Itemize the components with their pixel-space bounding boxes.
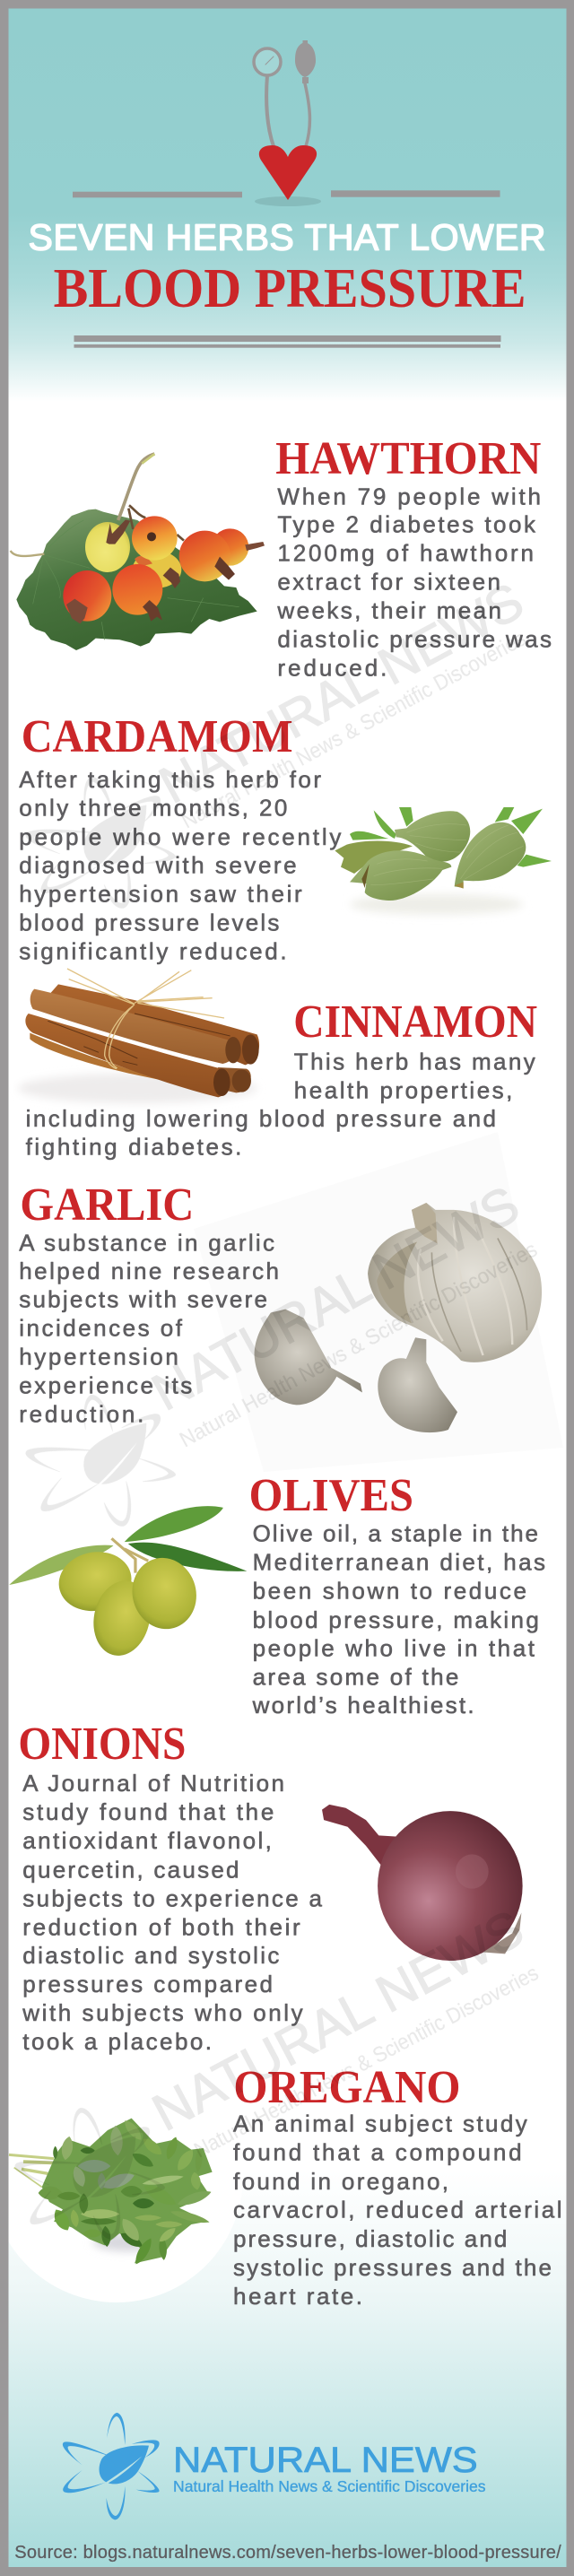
text: hawthorn: diastolic pressure was <box>277 626 552 653</box>
text: cinnamon: This herb has many <box>294 1049 535 1075</box>
watermark: middle <box>15 1175 542 1545</box>
text: olives <box>252 1519 545 1719</box>
source line: Source: blogs.naturalnews.com/seven-herbs-lower-blood-pressure/ <box>14 2543 561 2563</box>
header panel <box>9 9 567 402</box>
panel: cardamom <box>19 711 552 964</box>
illustration: olives with leaves <box>9 1506 247 1660</box>
text: onions: took a placebo. <box>22 2028 212 2055</box>
logo wordmark: NATURAL NEWS <box>173 2441 478 2480</box>
text: olives: been shown to reduce <box>253 1578 526 1605</box>
panel: onions <box>18 1719 523 2055</box>
garlic backdrop square <box>194 1132 563 1472</box>
footer gradient background <box>9 2171 567 2567</box>
text: cardamom: significantly reduced. <box>19 937 287 964</box>
icon: natural news atom leaf <box>63 2413 160 2519</box>
text: cardamom: hypertension saw their <box>19 880 302 907</box>
text: garlic: A substance in garlic <box>19 1229 274 1256</box>
watermark: middle: NATURAL NEWS <box>143 1175 528 1422</box>
heart shadow <box>255 196 321 206</box>
frame left edge fix <box>0 2063 9 2332</box>
text: onions: antioxidant flavonol, <box>22 1827 272 1854</box>
watermark: lower <box>4 1899 543 2258</box>
text: cardamom: After taking this herb for <box>19 766 321 793</box>
icon: blood pressure gauge and bulb <box>254 40 316 146</box>
text: hawthorn: reduced. <box>277 655 387 682</box>
text: onions: quercetin, caused <box>22 1856 239 1883</box>
header gradient background <box>9 9 567 402</box>
text: cardamom: blood pressure levels <box>19 909 279 936</box>
panel: cinnamon <box>18 969 537 1161</box>
illustration: cardamom pods <box>335 807 552 915</box>
text: cardamom: only three months, 20 <box>19 794 287 821</box>
text: onions: pressures compared <box>22 1971 273 1997</box>
panel: garlic <box>19 1179 542 1432</box>
white circle behind oregano <box>0 2049 243 2302</box>
text: olives: world’s healthiest. <box>252 1692 474 1719</box>
text: onions: diastolic and systolic <box>22 1942 279 1969</box>
text: cinnamon: including lowering blood pressure and <box>26 1105 496 1132</box>
text: onions <box>22 1770 323 2055</box>
illustration: cinnamon sticks <box>18 969 259 1103</box>
text: oregano: systolic pressures and the <box>233 2254 552 2281</box>
watermark: middle: Natural Health News & Scientific Discoveries <box>176 1237 542 1452</box>
footer logo <box>63 2413 486 2519</box>
text: olives: area some of the <box>253 1664 458 1691</box>
right top rule <box>331 190 500 197</box>
text: garlic: incidences of <box>19 1314 183 1341</box>
text: garlic: experience its <box>19 1371 192 1398</box>
heading: oregano: OREGANO <box>233 2062 461 2113</box>
text: oregano: found that a compound <box>233 2139 522 2166</box>
text: onions: A Journal of Nutrition <box>22 1770 284 1797</box>
text: onions: reduction of both their <box>22 1913 300 1940</box>
heading: cardamom: CARDAMOM <box>22 711 292 762</box>
watermark: upper: Natural Health News & Scientific Discoveries <box>178 626 530 833</box>
text: onions: study found that the <box>22 1798 274 1825</box>
watermark: upper <box>15 571 533 927</box>
watermark: upper: NATURAL NEWS <box>150 571 533 814</box>
text: oregano: found in oregano, <box>233 2168 448 2195</box>
text: hawthorn: When 79 people with <box>277 483 541 509</box>
title line 1: SEVEN HERBS THAT LOWER <box>29 217 545 258</box>
panel: oregano <box>9 2062 561 2310</box>
text: oregano: carvacrol, reduced arterial <box>233 2197 561 2224</box>
text: cardamom <box>19 766 341 964</box>
watermark: lower: Natural Health News & Scientific Discoveries <box>190 1961 543 2163</box>
text: oregano: pressure, diastolic and <box>233 2225 507 2252</box>
text: hawthorn: 1200mg of hawthorn <box>277 539 534 566</box>
title line 2: BLOOD PRESSURE <box>54 258 526 319</box>
text: cardamom: people who were recently <box>19 823 341 850</box>
lower rule thick <box>74 335 500 342</box>
heading: olives: OLIVES <box>249 1470 413 1521</box>
text: olives: Mediterranean diet, has <box>253 1548 545 1575</box>
text: cinnamon <box>26 1049 535 1161</box>
heading: onions: ONIONS <box>18 1719 186 1770</box>
text: cinnamon: fighting diabetes. <box>26 1134 241 1161</box>
text: cardamom: diagnosed with severe <box>19 852 297 879</box>
text: oregano <box>233 2110 561 2310</box>
text: hawthorn: weeks, their mean <box>276 596 501 623</box>
illustration: garlic bulb and cloves <box>255 1203 542 1432</box>
illustration: oregano sprig <box>9 2118 213 2267</box>
icon: red heart <box>259 145 317 200</box>
text: onions: subjects to experience a <box>22 1885 323 1912</box>
text: garlic: subjects with severe <box>19 1286 267 1313</box>
text: olives: people who live in that <box>253 1635 535 1662</box>
text: onions: with subjects who only <box>22 1999 303 2026</box>
text: cinnamon: health properties, <box>294 1076 512 1103</box>
illustration: red onion <box>322 1805 523 1961</box>
text: garlic <box>19 1229 279 1427</box>
text: garlic: helped nine research <box>19 1258 279 1284</box>
panel: hawthorn <box>11 433 552 682</box>
text: hawthorn: Type 2 diabetes took <box>277 511 536 538</box>
heading: cinnamon: CINNAMON <box>293 996 537 1048</box>
text: oregano: heart rate. <box>233 2283 362 2310</box>
lower rule thin <box>74 344 500 348</box>
text: hawthorn: extract for sixteen <box>277 569 500 596</box>
logo tagline: Natural Health News & Scientific Discoveries <box>173 2477 486 2495</box>
heading: hawthorn: HAWTHORN <box>275 433 541 484</box>
text: oregano: An animal subject study <box>233 2110 527 2137</box>
text: garlic: reduction. <box>19 1400 144 1427</box>
panel: olives <box>9 1470 545 1719</box>
text: garlic: hypertension <box>19 1343 178 1370</box>
illustration: hawthorn berries on leaf <box>11 454 265 650</box>
text: olives: Olive oil, a staple in the <box>253 1519 538 1546</box>
text: hawthorn <box>276 483 552 682</box>
text: olives: blood pressure, making <box>253 1606 539 1633</box>
watermark: lower: NATURAL NEWS <box>144 1899 533 2142</box>
left top rule <box>73 192 242 197</box>
heading: garlic: GARLIC <box>20 1179 194 1231</box>
